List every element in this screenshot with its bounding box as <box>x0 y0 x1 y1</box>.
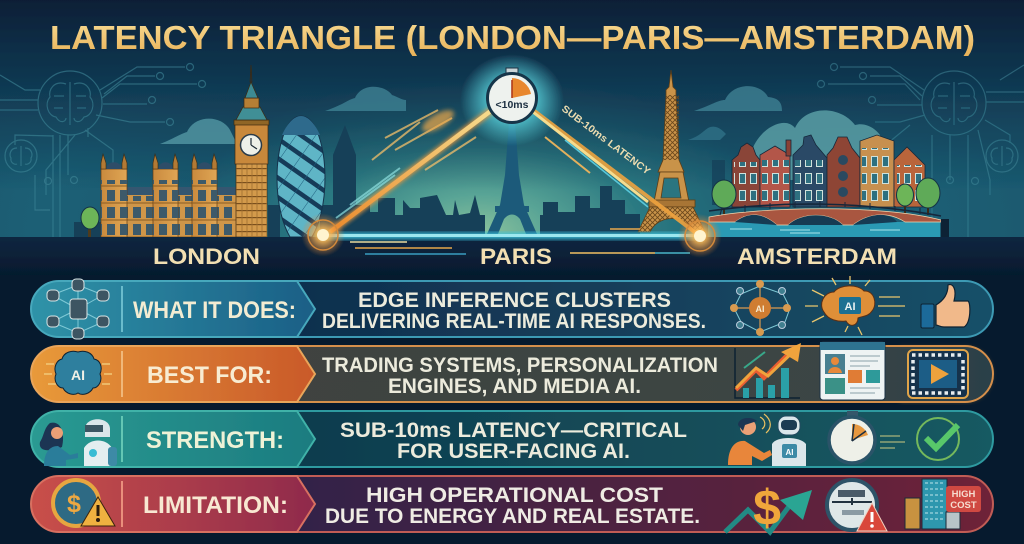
body <box>297 346 993 402</box>
divider <box>121 416 123 462</box>
distant silhouette skyline <box>74 125 725 237</box>
divider <box>121 286 123 332</box>
title: LATENCY TRIANGLE (LONDON—PARIS—AMSTERDAM) <box>50 19 975 56</box>
icon: AI brain: AI <box>71 367 85 383</box>
sky <box>0 0 1024 238</box>
icon: media film <box>908 350 968 398</box>
description: HIGH OPERATIONAL COST <box>366 484 663 507</box>
label: BEST FOR: <box>147 362 272 389</box>
latency triangle links <box>301 106 722 258</box>
body <box>297 411 993 467</box>
icon: energy meter <box>827 480 887 531</box>
glow behind stopwatch <box>460 54 564 146</box>
city label Amsterdam: AMSTERDAM <box>737 244 897 269</box>
icon: AI brain: AI <box>844 301 856 313</box>
tree left <box>81 207 99 237</box>
description <box>322 289 706 333</box>
body <box>297 476 993 532</box>
panel: strength <box>31 411 993 467</box>
icon: coin with warning: $ <box>67 490 81 518</box>
description <box>325 484 700 528</box>
Paris centre Eiffel silhouette <box>487 122 537 234</box>
icon: woman with robot <box>40 419 117 466</box>
icon: thumbs up <box>921 285 970 328</box>
London to stopwatch beam <box>330 106 492 232</box>
London node <box>301 213 345 257</box>
header <box>31 346 315 402</box>
label: WHAT IT DOES: <box>133 297 296 324</box>
Amsterdam trees <box>712 178 940 215</box>
city label London: LONDON <box>153 244 260 269</box>
icon: personalised web page <box>820 342 885 400</box>
city label Paris: PARIS <box>480 244 552 269</box>
circuit brain decoration left <box>0 64 206 237</box>
skyline scene <box>0 0 1024 275</box>
icon: AI brain <box>805 276 905 335</box>
description: DELIVERING REAL-TIME AI RESPONSES. <box>322 310 706 333</box>
icon: person and robot <box>728 414 806 466</box>
clouds <box>160 86 880 180</box>
Eiffel Tower <box>638 70 705 232</box>
Houses of Parliament <box>101 154 237 237</box>
speed streaks <box>350 229 690 254</box>
description: FOR USER-FACING AI. <box>397 440 630 463</box>
icon: dollar and arrow <box>725 480 812 536</box>
stopwatch icon <box>488 68 536 122</box>
icon: server network <box>47 279 109 339</box>
icon: AI network: AI <box>756 304 764 314</box>
icon: stopwatch <box>829 411 905 463</box>
panel: limitation <box>31 476 993 536</box>
Amsterdam canal houses <box>732 135 925 207</box>
description <box>322 354 718 398</box>
divider <box>121 351 123 397</box>
icon: person and robot: AI <box>786 448 794 457</box>
icon: dollar and arrow: $ <box>753 480 781 536</box>
icon: AI brain <box>44 351 112 394</box>
circuit brain decoration right <box>818 64 1024 237</box>
description <box>340 419 687 463</box>
Gherkin <box>277 116 325 237</box>
canal water <box>708 222 940 237</box>
icon: AI network <box>730 280 791 336</box>
icon: high cost building: HIGH <box>952 489 976 500</box>
sub-10ms latency label: SUB-10ms LATENCY <box>559 104 652 178</box>
description: ENGINES, AND MEDIA AI. <box>388 375 641 398</box>
stopwatch icon: <10ms <box>496 99 529 111</box>
description: SUB-10ms LATENCY—CRITICAL <box>340 419 687 442</box>
description: TRADING SYSTEMS, PERSONALIZATION <box>322 354 718 377</box>
panel: what it does <box>31 276 993 339</box>
label: STRENGTH: <box>146 427 284 454</box>
header <box>31 411 315 467</box>
icon: trading chart <box>735 343 801 398</box>
description: DUE TO ENERGY AND REAL ESTATE. <box>325 505 700 528</box>
icon: check <box>917 418 959 460</box>
divider <box>121 481 123 527</box>
icon: coin with warning <box>53 480 115 526</box>
description: EDGE INFERENCE CLUSTERS <box>358 289 671 312</box>
Big Ben <box>234 65 269 237</box>
Amsterdam node <box>678 214 722 258</box>
stopwatch to Amsterdam beam <box>533 110 700 236</box>
Paris link line <box>325 233 700 239</box>
label: LIMITATION: <box>143 492 288 519</box>
header <box>31 281 315 337</box>
body <box>297 281 993 337</box>
lower dark band <box>0 237 1024 275</box>
header <box>31 476 315 532</box>
icon: high cost building <box>905 479 981 529</box>
film glow <box>900 347 993 402</box>
panel: best for <box>31 342 993 402</box>
bridge <box>709 201 941 233</box>
icon: high cost building: COST <box>950 500 977 511</box>
